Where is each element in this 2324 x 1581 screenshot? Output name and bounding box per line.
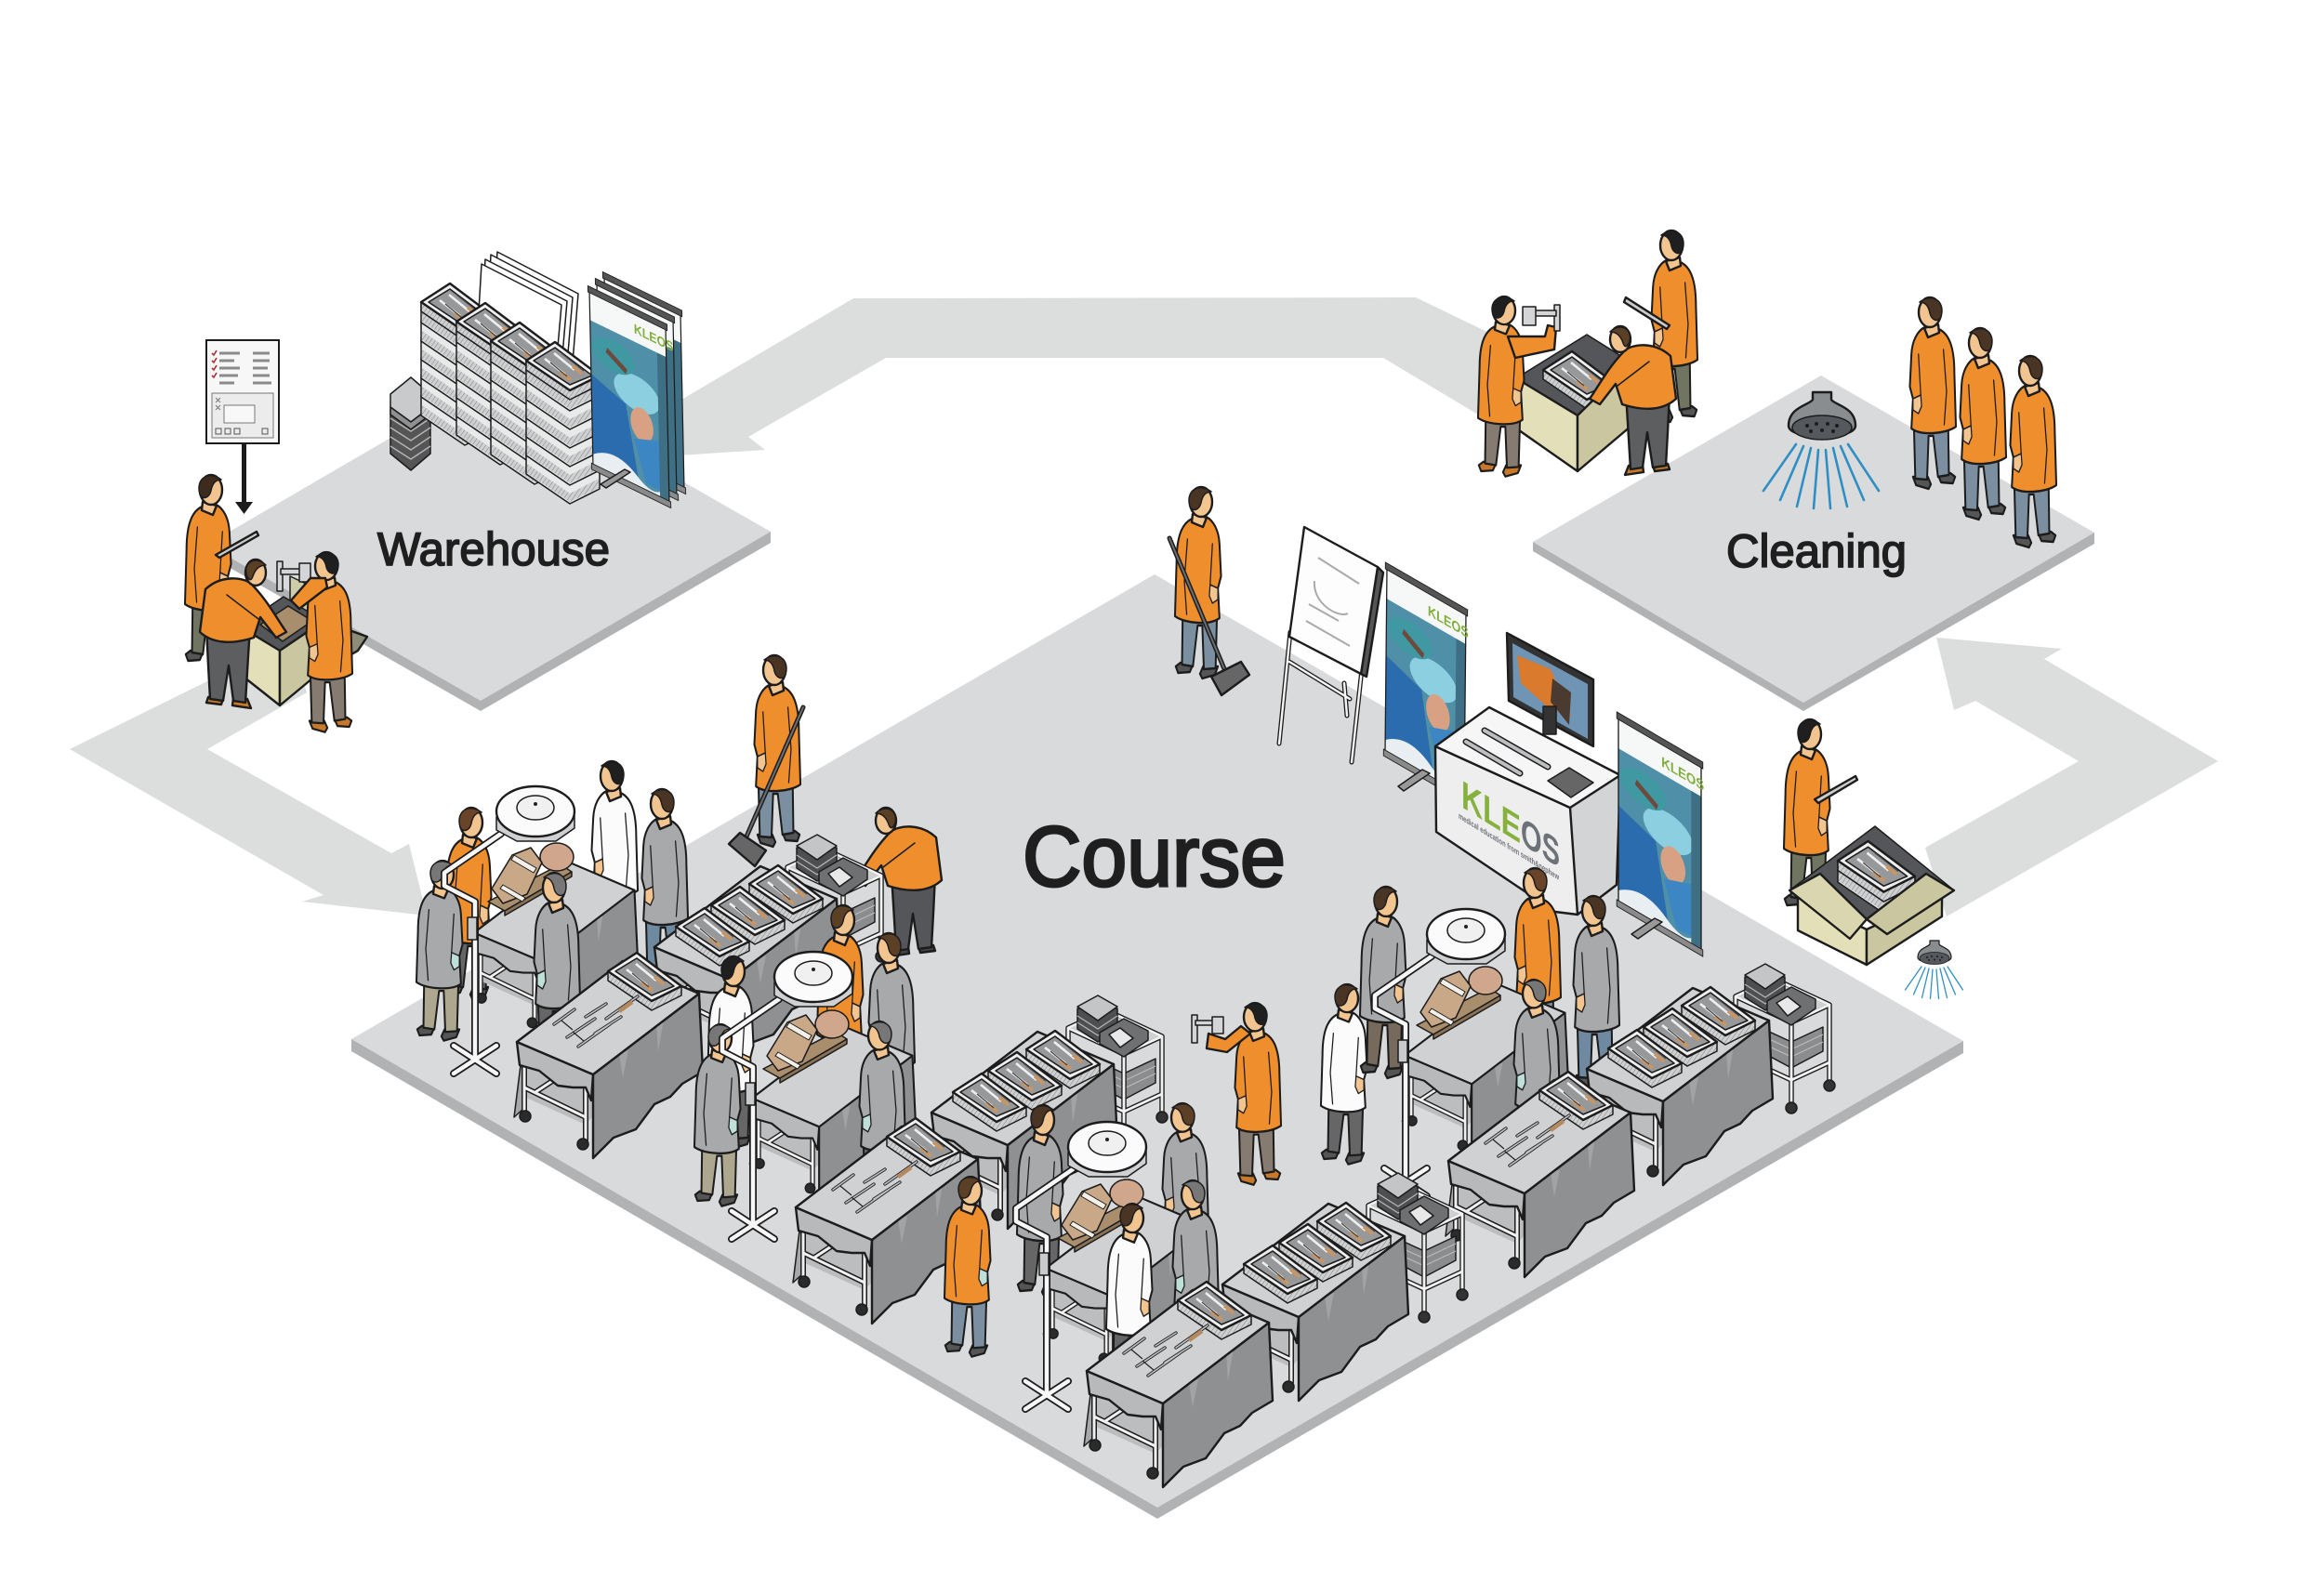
anatomical model bbox=[488, 843, 574, 916]
person 1 bbox=[1909, 297, 1956, 489]
checklist bbox=[206, 340, 279, 443]
instrument table 3 bbox=[1084, 1282, 1273, 1487]
banner foot bbox=[1398, 770, 1430, 791]
grey person front bbox=[1513, 980, 1560, 1162]
sweeping person left bbox=[729, 655, 803, 866]
cleaning station bbox=[1763, 297, 2056, 547]
white coat person bbox=[707, 956, 754, 1148]
KLEOS logo: KLE bbox=[1461, 771, 1521, 852]
orange bending person bbox=[855, 808, 942, 956]
grey person back bbox=[416, 861, 463, 1041]
person with clipboard bbox=[1624, 231, 1697, 422]
grey person front bbox=[534, 873, 580, 1064]
bending person bbox=[1590, 326, 1676, 475]
banner foot bbox=[601, 469, 630, 488]
operating lamp bbox=[444, 786, 574, 1074]
orange assistant bbox=[817, 905, 864, 1097]
instrument table 1 bbox=[514, 953, 703, 1158]
instrument table 4 bbox=[1446, 1072, 1634, 1277]
cleaning box with supervisor bbox=[1784, 719, 1963, 998]
three-tray table 1 bbox=[652, 865, 840, 1063]
anatomical model bbox=[1058, 1179, 1143, 1252]
banner middle bbox=[595, 278, 679, 501]
grey person bbox=[1162, 1103, 1208, 1287]
open box bbox=[240, 576, 367, 705]
instrument table 2 bbox=[793, 1118, 982, 1324]
grey person bbox=[641, 789, 688, 981]
grey person bbox=[1017, 1105, 1063, 1297]
tray stack 3 bbox=[491, 323, 564, 484]
grey person front bbox=[1172, 1180, 1219, 1366]
anatomical model bbox=[763, 1010, 849, 1083]
course table group 4 bbox=[1360, 868, 1619, 1196]
banner back bbox=[602, 271, 686, 494]
person holding instrument in course bbox=[1192, 1003, 1281, 1185]
platform: course bbox=[351, 574, 1963, 1519]
warehouse packing group bbox=[185, 340, 367, 732]
arrow: warehouse to course bbox=[70, 641, 427, 916]
orange assistant bbox=[1514, 868, 1561, 1060]
grey person front bbox=[859, 1021, 905, 1204]
banner front bbox=[588, 285, 677, 511]
white coat observer bbox=[1321, 984, 1367, 1165]
course table group 1 bbox=[416, 761, 688, 1074]
platform: warehouse bbox=[207, 375, 771, 711]
person holding instrument bbox=[291, 552, 352, 732]
heading: Cleaning: Cleaning bbox=[1726, 525, 1907, 577]
banner right bbox=[1617, 712, 1704, 957]
shower head bbox=[1763, 392, 1879, 508]
small tray stack bbox=[390, 377, 430, 470]
trolley 3 bbox=[1368, 1173, 1468, 1323]
person 2 bbox=[1960, 328, 2006, 520]
packing group near cleaning bbox=[1478, 231, 1697, 477]
person with clipboard bbox=[185, 475, 258, 666]
three-tray table 2 bbox=[929, 1031, 1117, 1229]
arrow: course to cleaning bbox=[1925, 638, 2218, 916]
banner left bbox=[1383, 562, 1469, 804]
banner front: KLEOS bbox=[634, 321, 673, 355]
banner left: KLEOS bbox=[1428, 603, 1469, 642]
flip chart bbox=[1279, 527, 1383, 762]
tray stack 4 bbox=[526, 342, 600, 504]
display area bbox=[1279, 527, 1704, 957]
model table bbox=[1402, 984, 1568, 1157]
open box bbox=[1512, 335, 1631, 471]
bending person bbox=[200, 560, 286, 708]
trolley 2 bbox=[1068, 995, 1168, 1145]
trolley 1 bbox=[787, 835, 887, 984]
KLEOS logo bbox=[1459, 770, 1560, 883]
flip chart panels bbox=[478, 252, 578, 368]
white coat person bbox=[1106, 1204, 1153, 1390]
monitor bbox=[1507, 633, 1593, 746]
operating lamp bbox=[722, 952, 852, 1239]
banner foot bbox=[1631, 918, 1662, 939]
arrow from checklist bbox=[235, 443, 253, 514]
sweeping person top bbox=[1169, 487, 1249, 695]
grey person back bbox=[694, 1024, 741, 1206]
box bbox=[1789, 826, 1954, 965]
warehouse storage: posters, trays, banners bbox=[390, 252, 686, 511]
grey person bbox=[1573, 896, 1619, 1087]
instrument held up bbox=[277, 561, 310, 591]
three-tray table 4 bbox=[1584, 987, 1773, 1185]
heading: Warehouse: Warehouse bbox=[377, 523, 610, 575]
display table bbox=[1435, 707, 1620, 915]
course table group 3 bbox=[1016, 1103, 1219, 1409]
course table group 2 bbox=[694, 905, 916, 1239]
orange person standing bbox=[944, 1177, 991, 1357]
instrument held up bbox=[1523, 305, 1560, 331]
banner right: KLEOS bbox=[1661, 754, 1704, 795]
KLEOS logo: OS bbox=[1521, 808, 1560, 876]
person with clipboard bbox=[1784, 719, 1857, 911]
three-tray table 3 bbox=[1220, 1203, 1408, 1401]
KLEOS logo: medical education from smith&nephew bbox=[1459, 811, 1559, 883]
model table bbox=[1043, 1197, 1209, 1370]
arrow: cleaning to warehouse bbox=[679, 297, 1497, 455]
grey person bbox=[1360, 887, 1406, 1078]
operating lamp bbox=[1016, 1122, 1146, 1409]
anatomical model bbox=[1417, 967, 1502, 1039]
heading: Course: Course bbox=[1023, 810, 1286, 904]
person 3 bbox=[2010, 356, 2056, 547]
model table bbox=[471, 862, 638, 1034]
tray stack 2 bbox=[456, 303, 530, 465]
grey person bbox=[868, 933, 915, 1125]
model table bbox=[749, 1027, 916, 1200]
operating lamp bbox=[1375, 909, 1505, 1196]
small shower bbox=[1906, 941, 1963, 998]
tray stack 1 bbox=[421, 283, 495, 445]
platform: cleaning bbox=[1533, 375, 2094, 711]
trolley 4 bbox=[1736, 964, 1835, 1113]
orange assistant bbox=[445, 808, 492, 999]
person holding instrument bbox=[1478, 296, 1556, 477]
white coat person bbox=[591, 761, 638, 953]
